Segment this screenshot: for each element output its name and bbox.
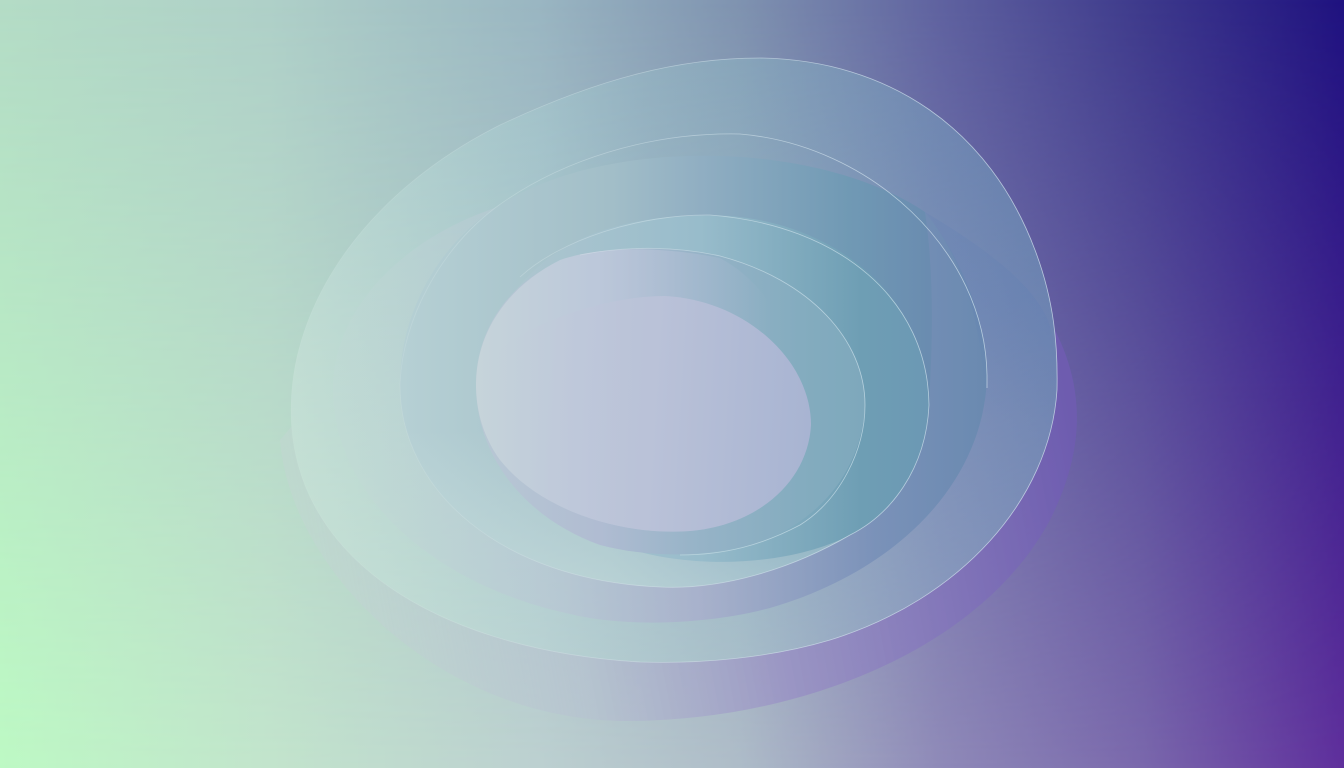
soft purple shadow oval bbox=[615, 330, 1077, 721]
pale lower band of third oval bbox=[400, 208, 929, 587]
second oval with lavender band bbox=[333, 208, 987, 623]
thin outlines bbox=[291, 58, 1057, 662]
fifth oval bbox=[476, 248, 865, 554]
inner core oval bbox=[476, 296, 811, 532]
pale highlight of fifth oval bbox=[476, 249, 811, 532]
faint right crescent bbox=[925, 212, 1056, 420]
outer translucent oval bbox=[291, 58, 1057, 662]
teal fourth oval bbox=[479, 215, 929, 562]
third oval bbox=[400, 156, 932, 587]
